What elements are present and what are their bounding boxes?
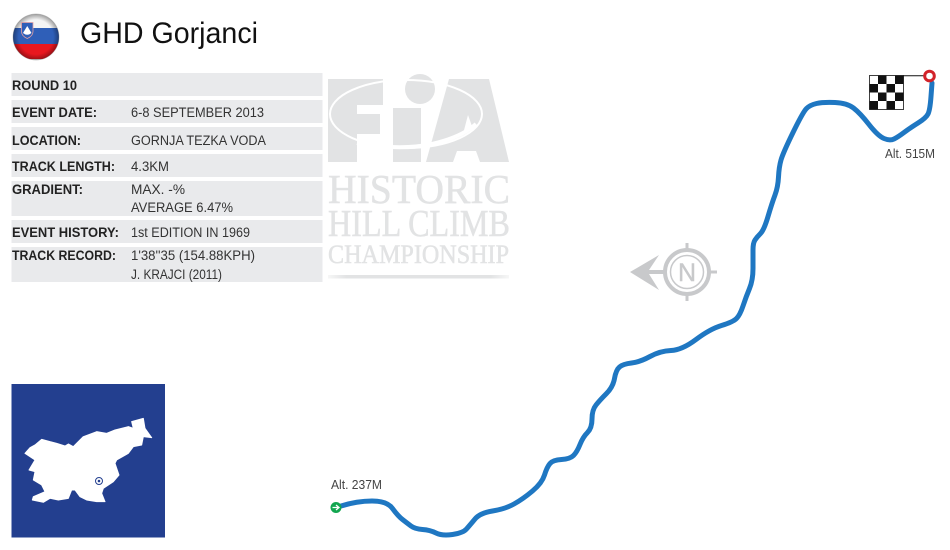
row: event history: 1st EDITION IN 1969 (131, 225, 250, 240)
watermark: FIA Historic Hill Climb Championship logo (328, 74, 510, 278)
label: start altitude: Alt. 237M (331, 478, 382, 492)
row: event date (12, 100, 322, 123)
row: event history (12, 220, 322, 243)
track route line (341, 83, 932, 535)
row: location (12, 127, 322, 150)
row: round: ROUND 10 (12, 78, 77, 93)
finish marker (925, 71, 934, 81)
icon: north compass arrow (630, 243, 717, 301)
row: gradient (12, 181, 322, 216)
watermark: FIA Historic Hill Climb Championship logo: HILL CLIMB (328, 203, 510, 245)
panel: event information table (12, 73, 322, 282)
row: gradient: MAX. -% (131, 182, 185, 197)
start marker (330, 502, 342, 513)
row: track length (12, 154, 322, 177)
row: gradient: AVERAGE 6.47% (131, 200, 233, 215)
row: event history: EVENT HISTORY: (12, 225, 119, 240)
icon: Slovenia flag ball (13, 14, 59, 60)
marker: event location (96, 478, 102, 484)
watermark: FIA Historic Hill Climb Championship logo: HISTORIC (328, 166, 510, 212)
row: location: GORNJA TEZKA VODA (131, 133, 266, 148)
row: track length: 4.3KM (131, 159, 169, 174)
row: track length: TRACK LENGTH: (12, 159, 115, 174)
icon: chequered finish flag (870, 76, 926, 110)
watermark: FIA Historic Hill Climb Championship logo: CHAMPIONSHIP (328, 240, 509, 269)
location map: Slovenia (12, 384, 165, 538)
row: event date: EVENT DATE: (12, 105, 97, 120)
label: finish altitude: Alt. 515M (885, 147, 935, 161)
row: round (12, 73, 322, 96)
row: location: LOCATION: (12, 133, 81, 148)
row: gradient: GRADIENT: (12, 182, 83, 197)
row: event date: 6-8 SEPTEMBER 2013 (131, 105, 264, 120)
row: track record: 1'38''35 (154.88KPH) (131, 248, 255, 263)
row: track record: J. KRAJCI (2011) (131, 267, 222, 282)
icon: north compass arrow: N (678, 259, 696, 287)
row: track record: TRACK RECORD: (12, 248, 116, 263)
title: GHD Gorjanci (80, 17, 258, 50)
row: track record (12, 247, 322, 282)
